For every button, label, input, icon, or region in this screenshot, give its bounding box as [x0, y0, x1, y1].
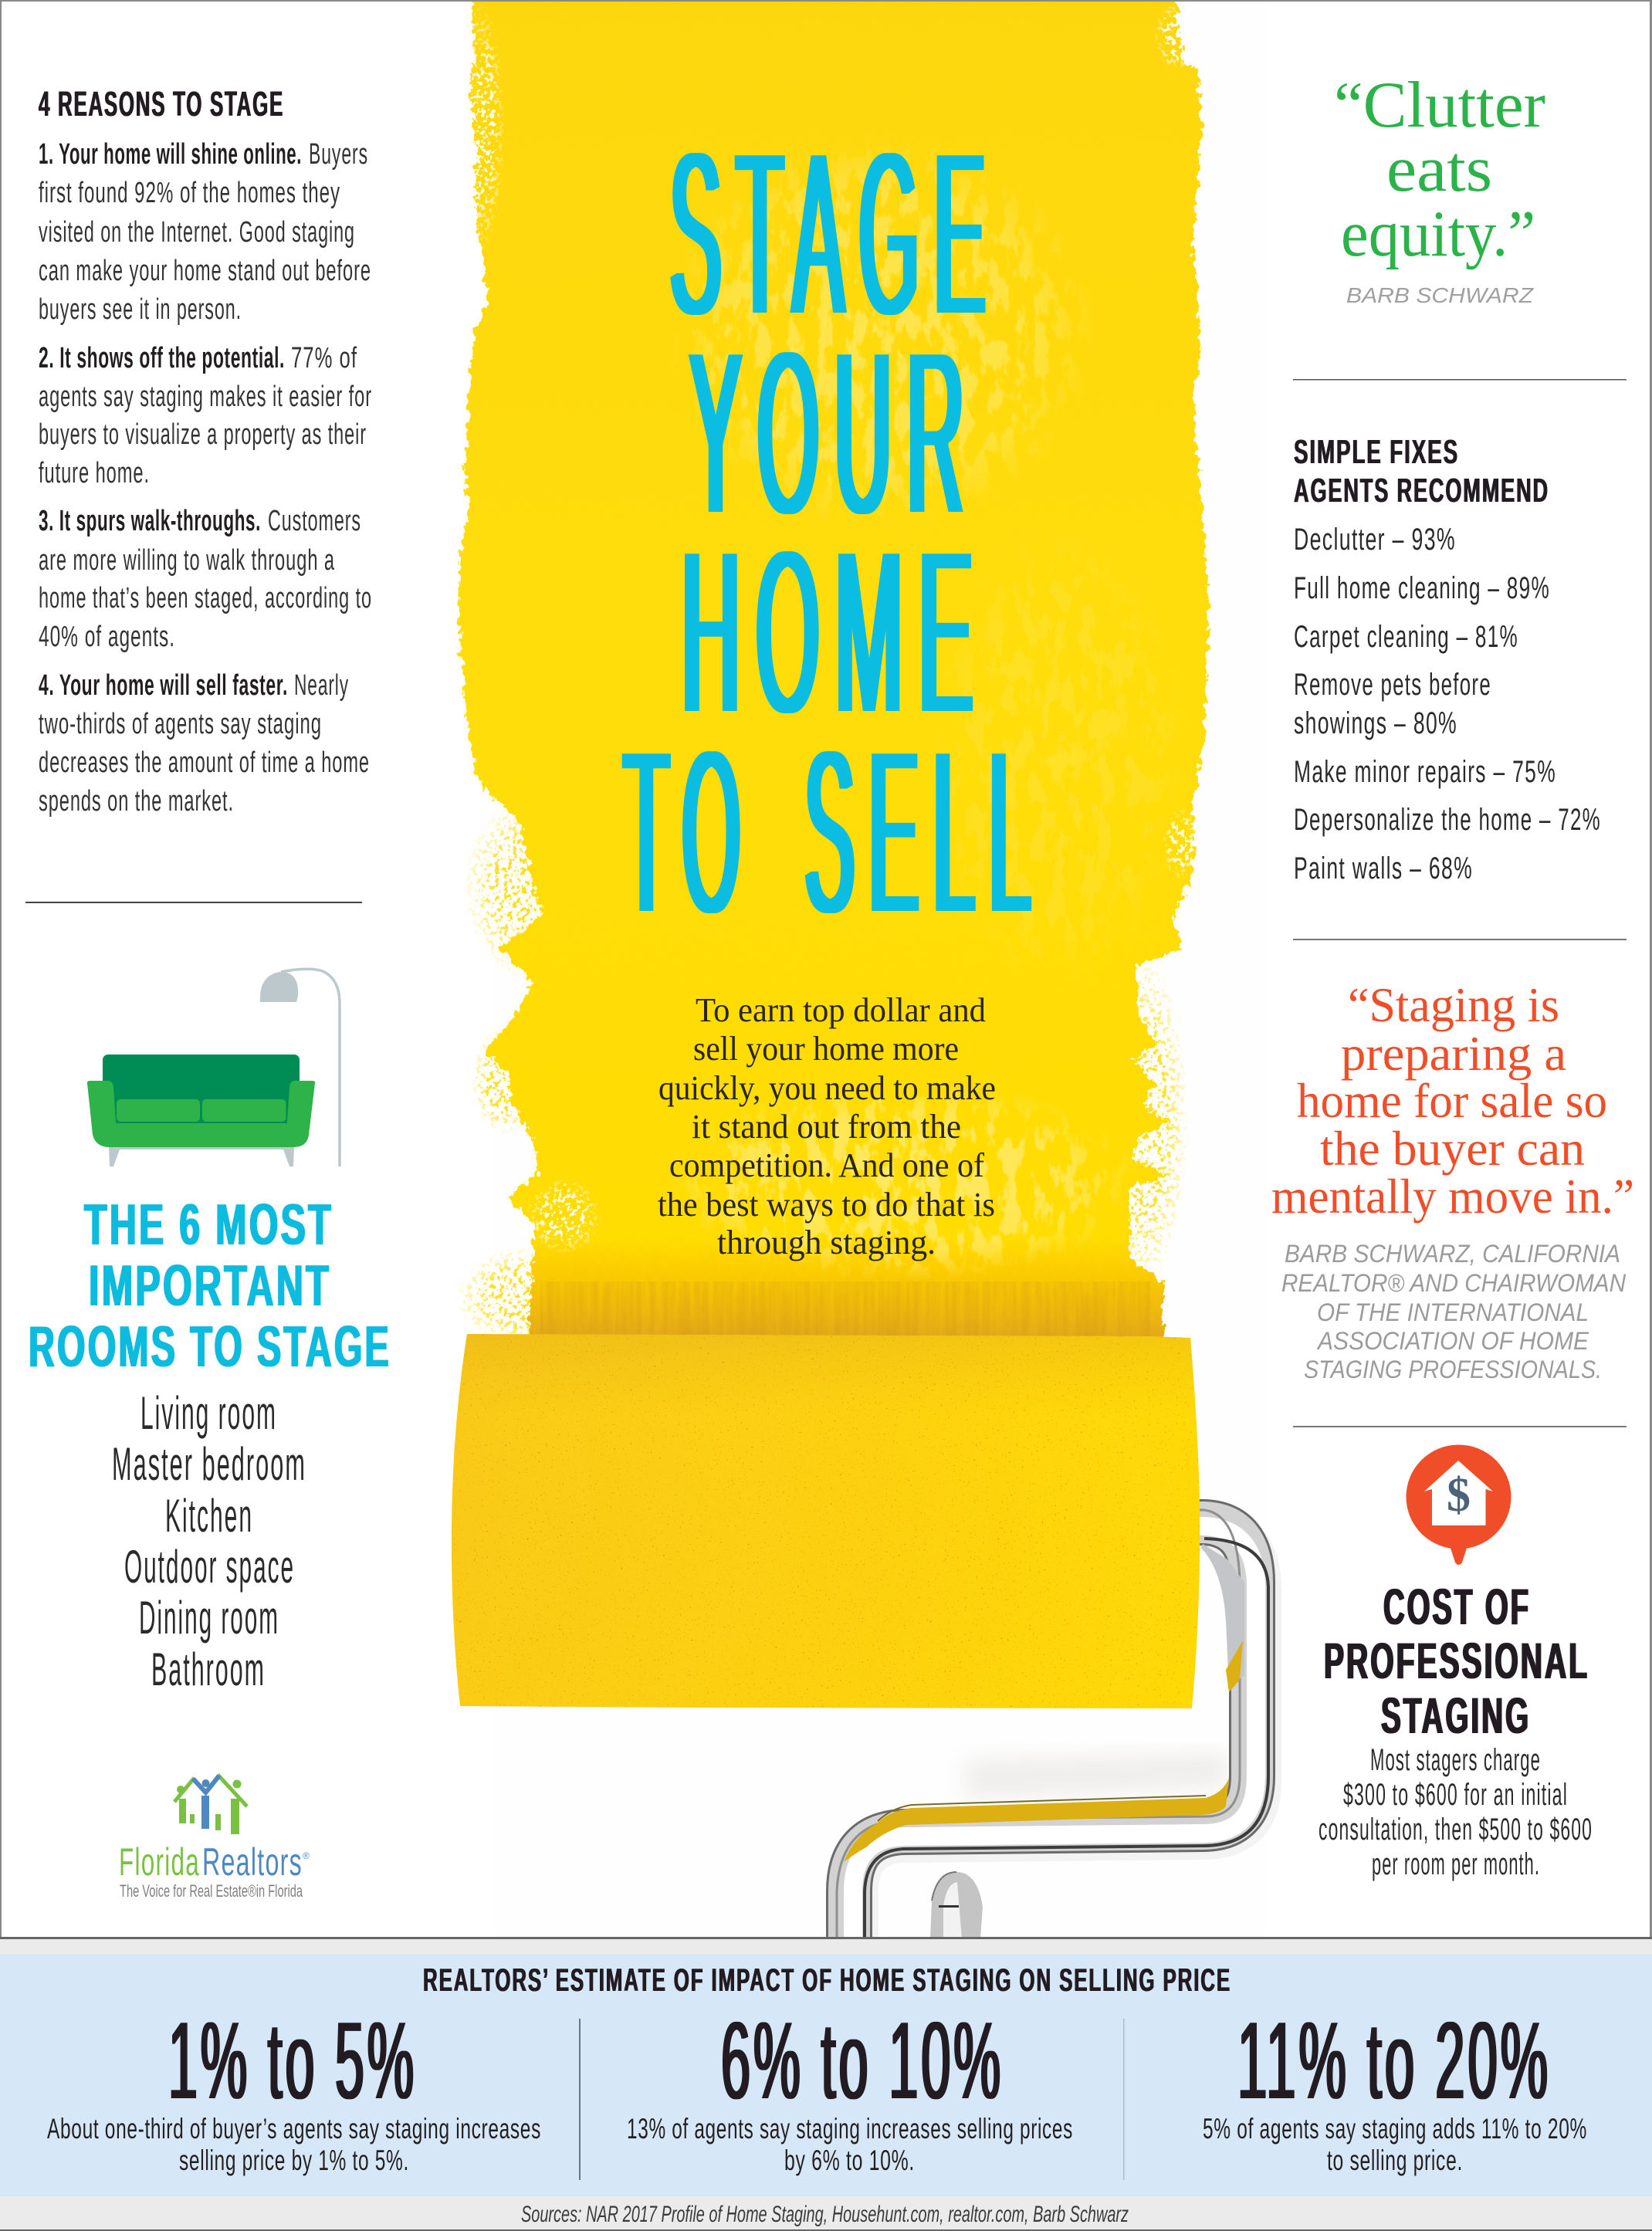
- intro paragraph: competition. And one of: [669, 1146, 984, 1184]
- stat: 6% to 10%: [627, 1999, 1073, 2176]
- stat: 6% to 10%: 13% of agents say staging increases selling prices: [627, 2113, 1073, 2145]
- quote: clutter eats equity: BARB SCHWARZ: [1346, 283, 1534, 307]
- reason 1: [39, 138, 371, 326]
- reason 3: are more willing to walk through a: [39, 544, 335, 577]
- intro paragraph: To earn top dollar and: [696, 991, 986, 1029]
- icon: houses and people: [174, 1776, 247, 1834]
- quote: staging is preparing: “Staging is: [1348, 977, 1559, 1032]
- room list: Outdoor space: [124, 1541, 295, 1593]
- text: YOUR: [689, 303, 980, 563]
- reason 1: first found 92% of the homes they: [39, 177, 340, 209]
- reason 2: 77% of: [291, 342, 357, 374]
- room list: Dining room: [139, 1592, 279, 1644]
- roller sleeve: [452, 1334, 1200, 1708]
- heading: rooms to stage: THE 6 MOST: [84, 1192, 333, 1257]
- reason 1: visited on the Internet. Good staging: [39, 216, 355, 249]
- stat: 6% to 10%: by 6% to 10%.: [784, 2145, 915, 2176]
- intro paragraph: sell your home more: [693, 1030, 959, 1068]
- intro paragraph: [658, 991, 996, 1261]
- icon: house with dollar sign pin: $: [1447, 1469, 1471, 1522]
- heading: cost: COST OF: [1383, 1578, 1531, 1635]
- fixes list: showings – 80%: [1294, 706, 1457, 740]
- reason 1: can make your home stand out before: [39, 255, 371, 287]
- intro paragraph: quickly, you need to make: [658, 1069, 996, 1107]
- reason 4: Nearly: [294, 669, 349, 702]
- reason 4: 4. Your home will sell faster.: [39, 669, 288, 702]
- handle shadow: [965, 1752, 1227, 1799]
- quote attribution: OF THE INTERNATIONAL: [1317, 1298, 1589, 1326]
- quote attribution: ASSOCIATION OF HOME: [1316, 1327, 1589, 1355]
- heading: simple fixes: [1294, 433, 1549, 510]
- stat: 11% to 20%: to selling price.: [1327, 2145, 1463, 2176]
- stat: 1% to 5%: About one-third of buyer’s agents say staging increases: [47, 2113, 541, 2145]
- heading: rooms to stage: IMPORTANT: [89, 1253, 331, 1318]
- logo: Florida Realtors: [119, 1776, 310, 1901]
- stat: 11% to 20%: [1203, 1999, 1587, 2176]
- room list: [112, 1387, 306, 1695]
- reason 3: Customers: [268, 505, 361, 537]
- heading: cost: STAGING: [1381, 1687, 1531, 1744]
- panel: simple fixes: [1294, 433, 1601, 885]
- fixes list: Carpet cleaning – 81%: [1294, 620, 1518, 654]
- heading: rooms to stage: ROOMS TO STAGE: [29, 1314, 391, 1379]
- quote: staging is preparing: mentally move in.”: [1271, 1169, 1634, 1224]
- panel: most important rooms: [29, 1192, 391, 1695]
- panel: cost of professional staging: [1319, 1578, 1593, 1881]
- reason 2: future home.: [39, 457, 150, 489]
- quote: staging is preparing: preparing a: [1341, 1026, 1566, 1081]
- fixes list: [1294, 523, 1601, 885]
- room list: Bathroom: [151, 1644, 266, 1695]
- reason 2: buyers to visualize a property as their: [39, 418, 367, 451]
- quote: clutter eats equity: [1334, 69, 1545, 307]
- room list: Living room: [140, 1387, 277, 1439]
- reason 2: agents say staging makes it easier for: [39, 381, 372, 413]
- room list: Master bedroom: [112, 1438, 306, 1490]
- fixes list: Paint walls – 68%: [1294, 851, 1473, 885]
- main title: [624, 103, 1045, 962]
- logo: Florida Realtors: The Voice for Real Estate®in Florida: [120, 1881, 303, 1901]
- reason 3: [39, 505, 372, 653]
- icon: house with dollar sign pin: [1407, 1445, 1512, 1565]
- quote: clutter eats equity: equity.”: [1341, 198, 1535, 270]
- reason 1: 1. Your home will shine online.: [39, 138, 302, 171]
- heading: rooms to stage: [29, 1192, 391, 1379]
- reason 4: decreases the amount of time a home: [39, 746, 370, 779]
- chrome handle: [837, 1510, 1268, 1939]
- reason 4: two-thirds of agents say staging: [39, 708, 322, 740]
- quote: staging is preparing: home for sale so: [1297, 1073, 1607, 1128]
- intro paragraph: it stand out from the: [692, 1108, 961, 1146]
- reason 2: [39, 342, 372, 489]
- quote attribution: STAGING PROFESSIONALS.: [1304, 1356, 1602, 1383]
- logo: Florida Realtors: Florida: [119, 1840, 200, 1884]
- bottom band: impact on selling price: [0, 1937, 1652, 2231]
- heading: cost: [1324, 1578, 1589, 1744]
- paint swath: [455, 0, 1209, 1347]
- quote attribution: REALTOR® AND CHAIRWOMAN: [1281, 1269, 1627, 1297]
- reason 4: [39, 669, 370, 818]
- quote attribution: BARB SCHWARZ, CALIFORNIA: [1285, 1240, 1620, 1268]
- quote: clutter eats equity: eats: [1386, 133, 1492, 205]
- intro paragraph: the best ways to do that is: [658, 1186, 995, 1224]
- fixes list: Remove pets before: [1294, 668, 1491, 702]
- cost description: [1319, 1743, 1593, 1881]
- logo: Florida Realtors: Realtors: [202, 1840, 303, 1884]
- room list: Kitchen: [165, 1490, 253, 1542]
- quote: staging is preparing: [1271, 977, 1634, 1383]
- reason 1: buyers see it in person.: [39, 293, 242, 326]
- stat: 1% to 5%: 1% to 5%: [168, 1999, 417, 2122]
- fixes list: Declutter – 93%: [1294, 523, 1456, 557]
- panel: 4 reasons to stage: [39, 84, 372, 818]
- intro paragraph: through staging.: [717, 1224, 936, 1261]
- heading: 4 reasons: 4 REASONS TO STAGE: [39, 84, 284, 124]
- reason 1: Buyers: [309, 138, 368, 171]
- quote attribution: [1281, 1240, 1627, 1383]
- logo: Florida Realtors: ®: [303, 1850, 310, 1861]
- text: HOME: [682, 502, 989, 762]
- reason 2: 2. It shows off the potential.: [39, 342, 285, 374]
- quote: staging is preparing: the buyer can: [1320, 1121, 1585, 1176]
- heading: simple fixes: SIMPLE FIXES: [1294, 433, 1459, 471]
- reason 4: spends on the market.: [39, 785, 234, 818]
- icon: sofa and floor lamp: [87, 969, 340, 1166]
- stat: 6% to 10%: 6% to 10%: [721, 1999, 1004, 2122]
- stat: 1% to 5%: [47, 1999, 541, 2176]
- sources line: Sources: NAR 2017 Profile of Home Staging, Househunt.com, realtor.com, Barb Schwarz: [521, 2202, 1129, 2227]
- stat: 1% to 5%: selling price by 1% to 5%.: [179, 2145, 409, 2176]
- reason 3: home that’s been staged, according to: [39, 582, 372, 614]
- reason 3: 3. It spurs walk-throughs.: [39, 505, 261, 537]
- text: STAGE: [670, 103, 1000, 364]
- quote: clutter eats equity: “Clutter: [1334, 69, 1545, 141]
- paint roller illustration: [452, 0, 1268, 1939]
- reason 3: 40% of agents.: [39, 621, 175, 653]
